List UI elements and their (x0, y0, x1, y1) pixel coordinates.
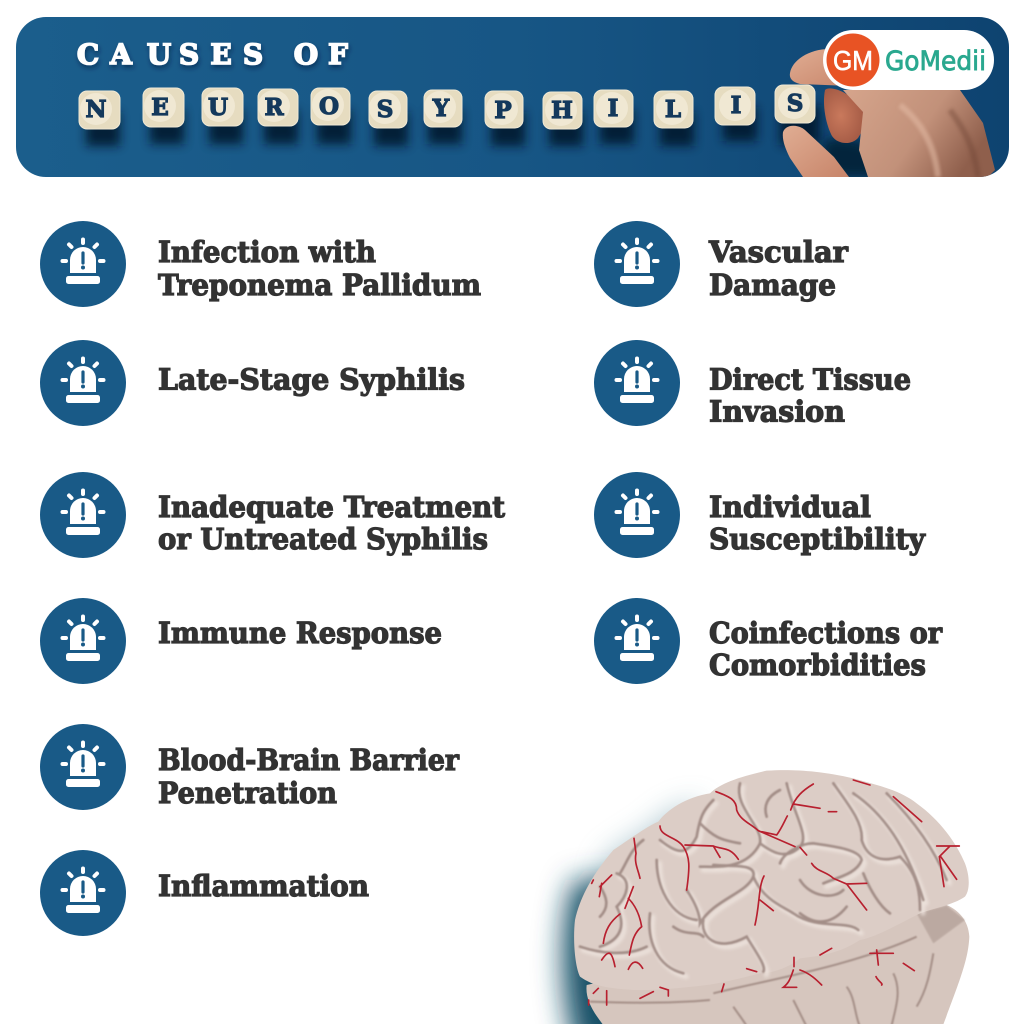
cause: direct tissue invasion: Invasion (709, 394, 845, 428)
letter dice: neurosyphilis (79, 85, 815, 129)
cause: blood-brain barrier penetration (40, 724, 460, 810)
logo: GoMedii: GM (833, 45, 873, 76)
cause: infection with treponema pallidum: Infection with (158, 235, 376, 269)
letter dice: neurosyphilis: Y (432, 95, 450, 122)
logo: GoMedii: GoMedii (885, 46, 986, 77)
cause: infection with treponema pallidum (40, 221, 481, 307)
cause: individual susceptibility (594, 472, 926, 558)
cause: late-stage syphilis (40, 340, 465, 426)
letter dice: neurosyphilis: N (85, 96, 107, 123)
cause: inadequate treatment (40, 472, 506, 558)
cause: late-stage syphilis: Late-Stage Syphilis (158, 362, 465, 396)
cause: vascular damage (594, 221, 849, 307)
lower brain lobe (586, 905, 969, 1024)
cause: direct tissue invasion: Direct Tissue (709, 362, 911, 396)
cause: individual susceptibility: Susceptibility (709, 522, 926, 556)
letter dice: neurosyphilis: R (264, 94, 284, 121)
letter dice: neurosyphilis: I (731, 92, 741, 119)
cause: inflammation (40, 850, 369, 936)
cause: direct tissue invasion (594, 340, 911, 428)
brain illustration (563, 770, 969, 1024)
cause: coinfections or comorbidities: Comorbidities (709, 648, 926, 682)
letter dice: neurosyphilis: I (608, 95, 618, 122)
hand holding die (783, 49, 995, 177)
cause: inadequate treatment: or Untreated Syphilis (158, 522, 488, 556)
letter dice: neurosyphilis: H (551, 97, 573, 124)
cause: vascular damage: Damage (709, 268, 836, 302)
cause: inadequate treatment: Inadequate Treatment (158, 490, 506, 524)
letter dice: neurosyphilis: L (665, 96, 681, 123)
letter dice: neurosyphilis: S (787, 90, 803, 117)
heading: causes of: CAUSESOF (77, 38, 348, 71)
cause: blood-brain barrier penetration: Blood-Brain Barrier (158, 743, 460, 777)
cause: coinfections or comorbidities: Coinfections or (709, 616, 943, 650)
letter dice: neurosyphilis: E (151, 94, 169, 121)
dice shadows (86, 105, 820, 146)
logo: GoMedii (823, 30, 994, 90)
cause: individual susceptibility: Individual (709, 490, 871, 524)
cause: infection with treponema pallidum: Treponema Pallidum (158, 268, 481, 302)
cause: inflammation: Inflammation (158, 869, 369, 903)
red vessels (589, 780, 959, 1005)
letter dice: neurosyphilis: O (319, 93, 339, 120)
cause: vascular damage: Vascular (708, 235, 849, 269)
header banner (16, 17, 1009, 177)
upper brain lobe (574, 770, 969, 990)
cause: coinfections or comorbidities (594, 598, 943, 684)
letter dice: neurosyphilis: P (494, 97, 512, 124)
letter dice: neurosyphilis: U (208, 94, 228, 121)
cause: blood-brain barrier penetration: Penetration (158, 776, 337, 810)
cause: immune response: Immune Response (158, 616, 442, 650)
letter dice: neurosyphilis: S (377, 96, 393, 123)
cause: immune response (40, 598, 442, 684)
